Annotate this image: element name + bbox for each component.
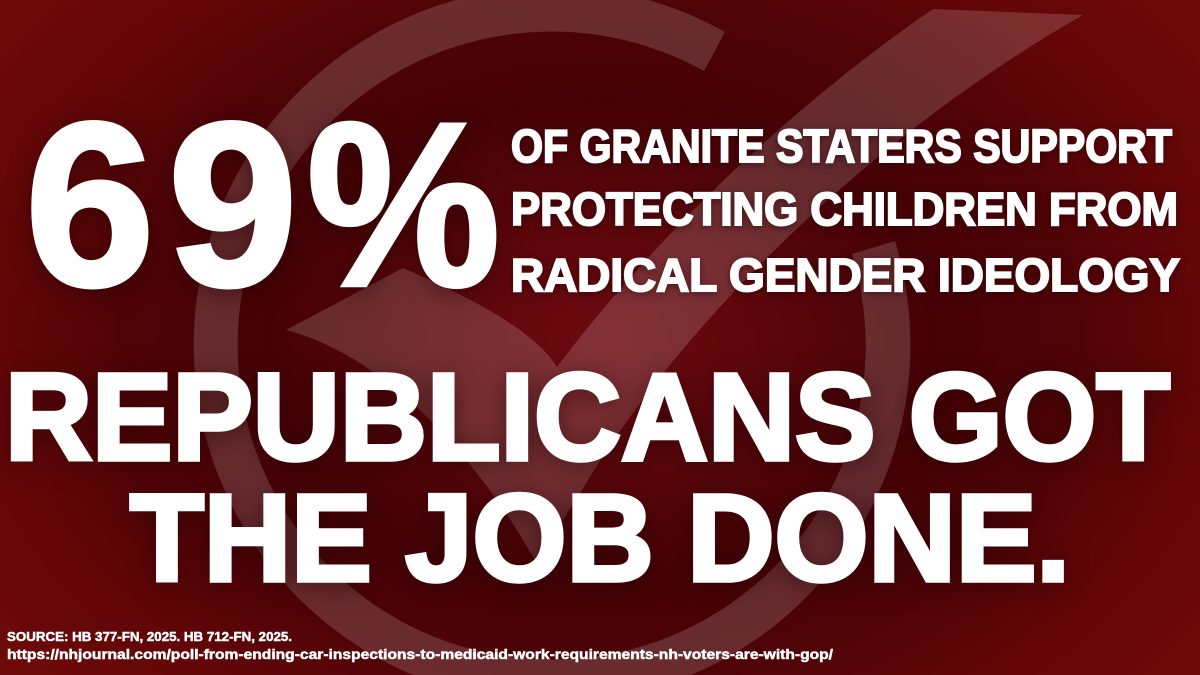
headline line 1: REPUBLICANS GOT (5, 350, 1170, 486)
source note (7, 629, 833, 662)
statement line 3: RADICAL GENDER IDEOLOGY (511, 249, 1180, 301)
percent sign: % (307, 75, 500, 335)
statistic: 69% (25, 75, 500, 335)
source citation: SOURCE: HB 377-FN, 2025. HB 712-FN, 2025. (7, 629, 292, 644)
logo watermark: ring and checkmark (194, 0, 1083, 675)
digit 6: 6 (25, 75, 155, 335)
watermark checkmark (286, 9, 1083, 560)
statement line 2: PROTECTING CHILDREN FROM (511, 183, 1178, 235)
digit 9: 9 (168, 75, 298, 335)
watermark ring (194, 0, 910, 675)
source url: https://nhjournal.com/poll-from-ending-car-inspections-to-medicaid-work-requirements-nh-voters-are-with-gop/ (7, 646, 833, 662)
headline (5, 350, 1170, 608)
headline line 2: THE JOB DONE. (130, 470, 1070, 608)
statement text block (511, 120, 1180, 301)
